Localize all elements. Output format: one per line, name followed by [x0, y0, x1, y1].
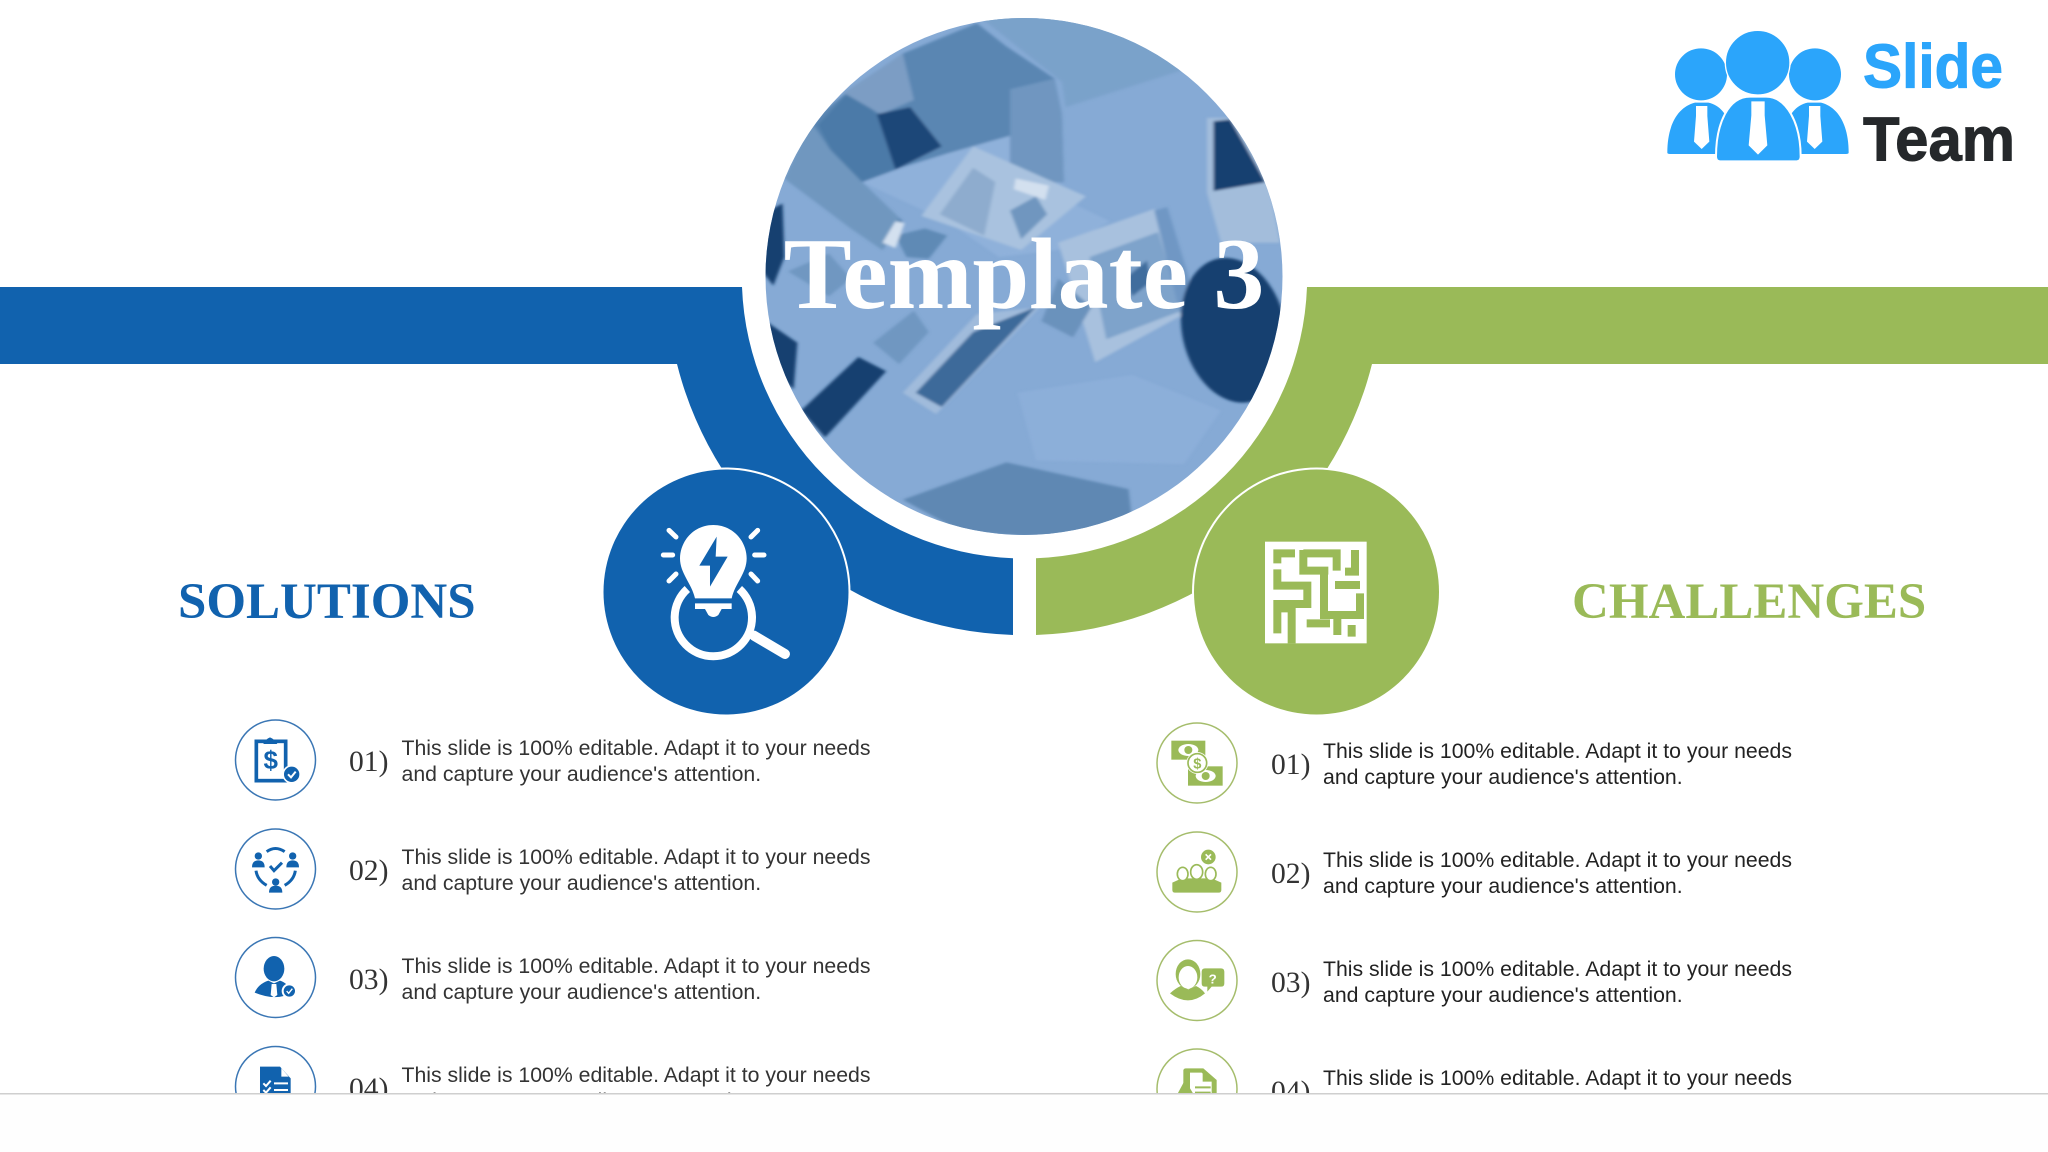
solution 01 — [236, 720, 870, 800]
solution 01: 01) — [349, 746, 388, 778]
challenge 02: 02) — [1271, 858, 1310, 890]
bottom cover band cropping the lists — [0, 1093, 2048, 1152]
solution 03: This slide is 100% editable. Adapt it to your needs — [402, 954, 870, 978]
panel: solutions list — [236, 720, 870, 1126]
challenge 04: and capture your audience's attention. — [1323, 1092, 1683, 1116]
challenge 03: ? — [1209, 971, 1217, 986]
challenge 01: and capture your audience's attention. — [1323, 765, 1683, 789]
challenge 04: 04) — [1271, 1076, 1310, 1108]
panel: challenges list — [1157, 723, 1792, 1129]
logo: SlideTeam — [1667, 30, 2015, 175]
solution 03: and capture your audience's attention. — [402, 980, 761, 1004]
challenge 02: and capture your audience's attention. — [1323, 874, 1683, 898]
solution 01: This slide is 100% editable. Adapt it to your needs — [402, 736, 870, 760]
challenge 01: This slide is 100% editable. Adapt it to your needs — [1323, 739, 1792, 763]
heading: challenges: CHALLENGES — [1572, 574, 1926, 630]
logo: SlideTeam: Team — [1863, 106, 2015, 175]
solution 02: 02) — [349, 855, 388, 887]
challenge 02: This slide is 100% editable. Adapt it to your needs — [1323, 848, 1792, 872]
challenge 03: 03) — [1271, 967, 1310, 999]
solution 02 — [236, 829, 870, 909]
challenges circle with maze icon — [1192, 468, 1441, 716]
solution 02: and capture your audience's attention. — [402, 871, 761, 895]
challenge 01: $ — [1193, 756, 1201, 772]
challenge 03: This slide is 100% editable. Adapt it to your needs — [1323, 957, 1792, 981]
green banner and arc — [1036, 287, 2048, 635]
challenge 02 — [1157, 832, 1792, 912]
solutions circle with bulb and magnifier icon — [602, 468, 850, 716]
challenge 03: and capture your audience's attention. — [1323, 983, 1683, 1007]
challenge 01: 01) — [1271, 749, 1310, 781]
blue banner and arc — [0, 287, 1013, 635]
solution 04: 04) — [349, 1073, 388, 1105]
photo: business team at a table, blue duotone — [760, 10, 1300, 540]
title: Template 3 — [784, 218, 1264, 331]
challenge 04 — [1157, 1049, 1792, 1129]
solution 01: $ — [263, 745, 278, 775]
solution 01: and capture your audience's attention. — [402, 762, 761, 786]
challenge 03 — [1157, 940, 1792, 1020]
solution 04: and capture your audience's attention. — [402, 1089, 761, 1113]
solution 02: This slide is 100% editable. Adapt it to your needs — [402, 845, 870, 869]
solution 03: 03) — [349, 964, 388, 996]
challenge 01 — [1157, 723, 1792, 803]
logo: SlideTeam: Slide — [1863, 32, 2003, 102]
heading: solutions: SOLUTIONS — [178, 574, 476, 630]
solution 04: This slide is 100% editable. Adapt it to your needs — [402, 1063, 870, 1087]
challenge 04: This slide is 100% editable. Adapt it to your needs — [1323, 1066, 1792, 1090]
solution 04 — [236, 1046, 870, 1126]
solution 03 — [236, 938, 870, 1018]
